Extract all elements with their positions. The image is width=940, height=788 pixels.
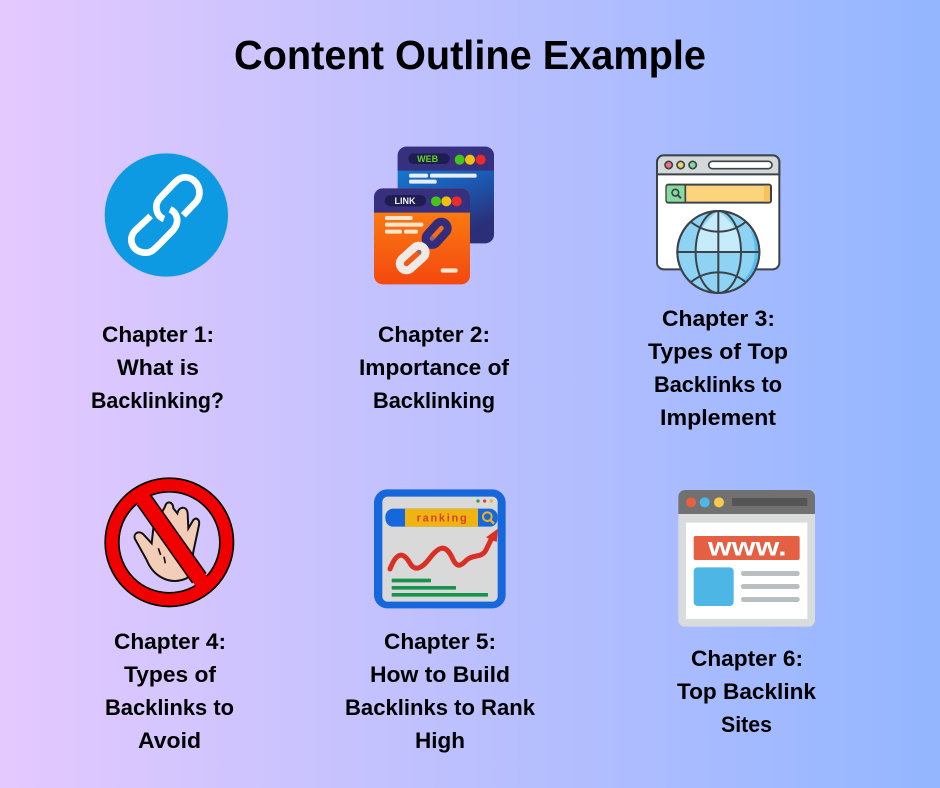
chapter 6 label: Top Backlink [677,679,816,704]
chapter 2 label: Chapter 2: [378,322,490,347]
panel: chapter 1 [91,153,228,413]
icon: ranking chart window: ranking [417,512,467,524]
chapter 6 label: Sites [721,712,772,737]
panel: chapter 6 [677,490,816,737]
chapter 4 label: Avoid [138,728,201,753]
chapter 3 label: Chapter 3: [662,306,775,331]
panel: chapter 3 [648,155,788,430]
chapter 1 label: What is [117,355,199,380]
panel: chapter 5 [345,489,535,753]
chapter 5 label: Chapter 5: [384,629,496,654]
chapter 3 label [648,306,788,430]
chapter 4 label: Backlinks to [105,695,234,720]
chapter 5 label: How to Build [370,662,510,687]
icon: prohibited hand [112,485,227,600]
chapter 2 label [359,322,509,413]
panel: chapter 4 [105,485,234,753]
chapter 3 label: Backlinks to [654,372,782,397]
chapter 4 label: Chapter 4: [114,629,226,654]
chapter 3 label: Types of Top [648,339,788,364]
chapter 1 label [91,322,224,413]
chapter 6 label: Chapter 6: [691,646,803,671]
title: Content Outline Example [234,32,706,78]
chapter 5 label: High [415,728,465,753]
icon: chain link in blue circle [105,153,228,277]
icon: www browser window: www. [707,531,787,561]
icon: www browser window [678,490,815,627]
icon: web and link browser windows: WEB [417,154,439,164]
chapter 4 label: Types of [124,662,217,687]
chapter 5 label: Backlinks to Rank [345,695,535,720]
chapter 5 label [345,629,535,753]
icon: web and link browser windows [374,147,494,284]
chapter 2 label: Backlinking [373,388,495,413]
chapter 4 label [105,629,234,753]
chapter 6 label [677,646,816,737]
panel: chapter 2 [359,147,509,413]
chapter 1 label: Backlinking? [91,388,224,413]
chapter 3 label: Implement [660,405,777,430]
icon: ranking chart window [374,489,506,608]
chapter 1 label: Chapter 1: [102,322,214,347]
icon: web and link browser windows: LINK [395,196,416,206]
icon: browser with globe [657,155,779,293]
chapter 2 label: Importance of [359,355,509,380]
